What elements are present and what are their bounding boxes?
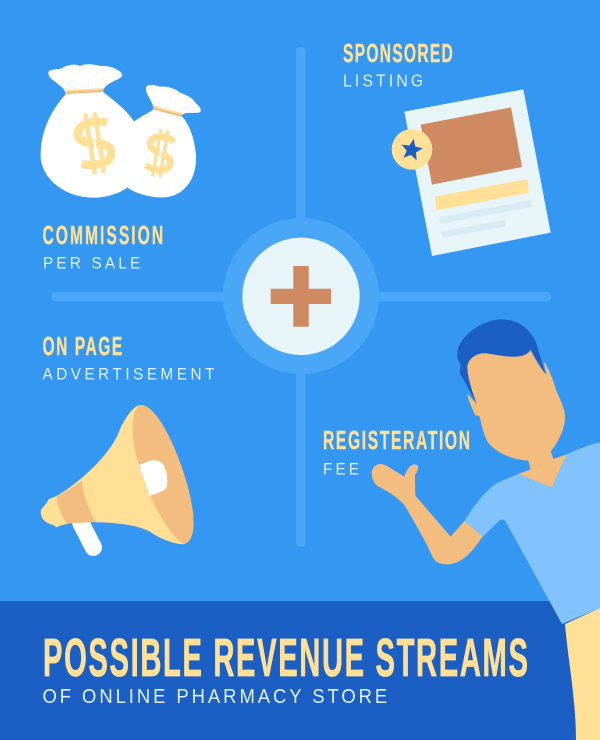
title: POSSIBLE REVENUE STREAMS: [43, 629, 528, 688]
heading: registeration: REGISTERATION: [323, 426, 470, 455]
cross divider lines: [51, 47, 551, 547]
icon: megaphone: [41, 405, 194, 547]
icon: sponsored listing card: [392, 89, 551, 256]
head and arm: [372, 319, 600, 624]
text: advertisement: ADVERTISEMENT: [42, 365, 215, 384]
bottom banner: [0, 601, 600, 740]
subtitle: OF ONLINE PHARMACY STORE: [42, 685, 387, 708]
trousers: [565, 608, 600, 740]
heading: on page: ON PAGE: [42, 332, 122, 361]
text: listing: LISTING: [343, 71, 423, 91]
heading: commission: COMMISSION: [42, 221, 163, 250]
heading: sponsored: SPONSORED: [343, 39, 453, 68]
center plus badge: [223, 218, 379, 374]
illustration: man: [372, 319, 600, 740]
text: per sale: PER SALE: [43, 254, 140, 273]
text: fee: FEE: [323, 460, 359, 479]
icon: money bags: [41, 64, 201, 198]
